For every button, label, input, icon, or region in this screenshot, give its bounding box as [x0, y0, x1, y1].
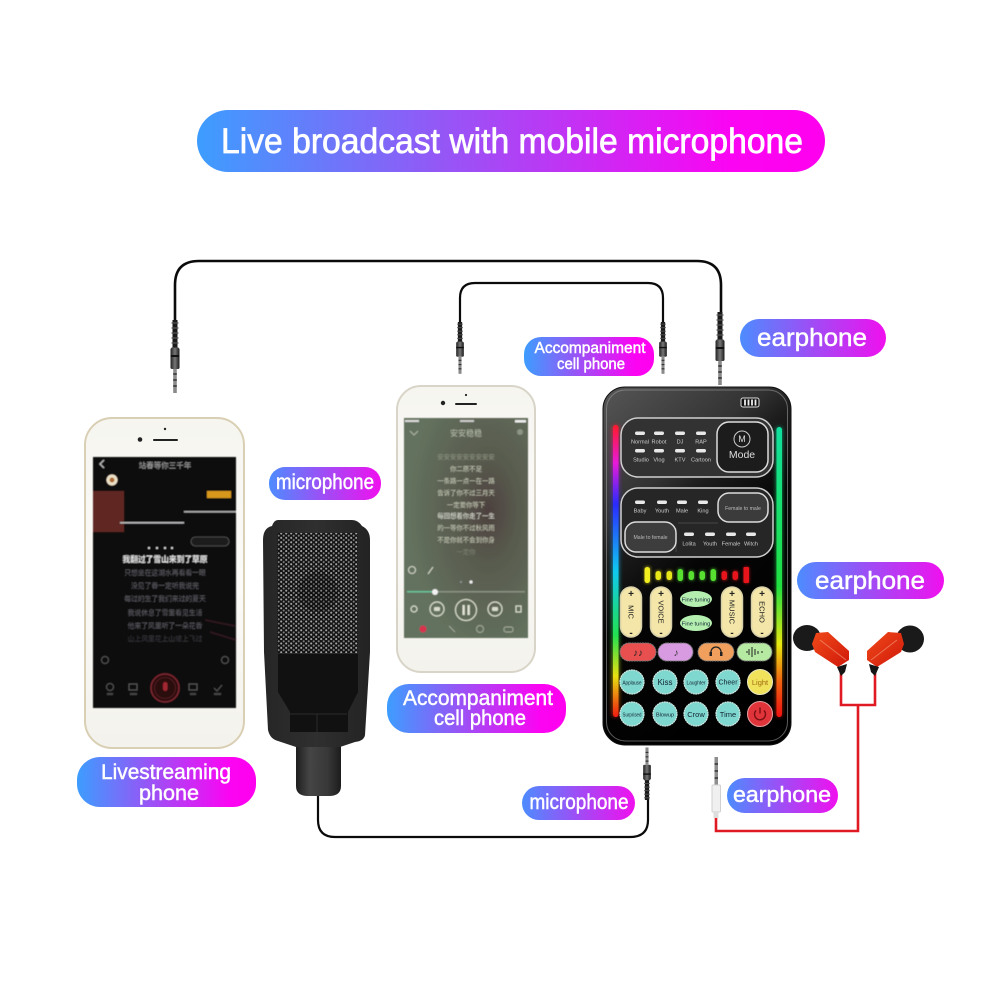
- female to male button: Female to male: [725, 506, 761, 512]
- lyrics: 我翻过了雪山来到了草原: [122, 554, 208, 564]
- progress bar: [407, 591, 525, 592]
- volume sliders: ECHO: [758, 601, 766, 623]
- power button: [748, 702, 772, 726]
- sound effect buttons: Applause: [622, 680, 642, 686]
- lyrics: 一定你: [456, 547, 476, 556]
- label: microphone (left): [269, 467, 381, 500]
- panel: voice selection: [621, 488, 773, 557]
- volume sliders: [620, 587, 772, 639]
- record button: [151, 674, 179, 702]
- device body: [603, 387, 791, 745]
- label: earphone (top): earphone: [757, 324, 867, 352]
- sound effect buttons: Surprised: [622, 712, 642, 718]
- battery indicator: [741, 398, 759, 407]
- panel: voice selection: Female: [722, 542, 740, 548]
- cable: microphone to device: [318, 747, 651, 837]
- left earbud: [793, 625, 849, 676]
- panel: mode selection: KTV: [675, 458, 686, 464]
- sound effect buttons: Crow: [687, 710, 705, 719]
- phone sensors: [441, 394, 477, 405]
- volume sliders: +: [628, 589, 634, 600]
- panel: mode selection: Cartoon: [691, 458, 711, 464]
- sound effect buttons: Time: [720, 710, 736, 719]
- panel: mode selection: Robot: [652, 440, 667, 446]
- panel: voice selection: King: [697, 508, 709, 514]
- lyrics: 一定要你等下: [447, 500, 486, 509]
- playback controls: [411, 600, 521, 620]
- mic grille: [277, 533, 358, 653]
- song title: 安安稳稳: [450, 428, 482, 438]
- volume sliders: -: [730, 628, 734, 639]
- panel: mode selection: [621, 418, 773, 477]
- panel: voice selection: Witch: [744, 542, 758, 548]
- sound effect buttons: Blowup: [656, 712, 674, 718]
- microphone: [263, 520, 370, 796]
- earphones: [712, 625, 924, 831]
- song title: 站春等你三千年: [139, 460, 192, 470]
- volume sliders: -: [760, 628, 764, 639]
- lyrics: [437, 452, 495, 556]
- female to male button: [718, 493, 768, 522]
- lyrics: 每回想着你走了一生: [437, 511, 495, 520]
- phone: livestreaming: [85, 418, 244, 748]
- title banner: Live broadcast with mobile microphone: [221, 122, 803, 161]
- phone body: [85, 418, 244, 748]
- panel: voice selection: Baby: [634, 508, 647, 514]
- male to female button: [625, 522, 676, 552]
- mic body: [263, 520, 370, 747]
- sound effect buttons: [620, 670, 772, 726]
- phone screen: 他来了风里听了一朵花香: [128, 621, 203, 630]
- sound effect buttons: Laughter: [686, 680, 706, 686]
- label: earphone (top): [740, 319, 886, 357]
- volume sliders: -: [629, 628, 633, 639]
- label: accompaniment cell phone (top): Accompaniment: [534, 340, 646, 357]
- label: accompaniment cell phone (bottom): Accompaniment: [403, 687, 553, 710]
- label: livestreaming phone: Livestreaming: [101, 761, 231, 784]
- label: microphone (bottom): microphone: [530, 791, 628, 814]
- label: livestreaming phone: [77, 757, 256, 807]
- phone: accompaniment: [397, 386, 535, 672]
- sound effect buttons: Kiss: [657, 678, 673, 687]
- fine tuning buttons: [680, 591, 712, 631]
- volume sliders: +: [759, 589, 765, 600]
- phone body: [397, 386, 535, 672]
- earphone wires: [716, 672, 875, 831]
- earphone plug: [712, 757, 720, 818]
- title banner: [197, 110, 825, 172]
- panel: mode selection: Vlog: [653, 458, 665, 464]
- voice changer device: [603, 387, 791, 745]
- lyrics: 告诉了你不过三月天: [437, 488, 495, 497]
- right earbud: [867, 626, 924, 676]
- label: earphone (bottom): earphone: [733, 782, 831, 807]
- mode button: Mode: [729, 449, 755, 461]
- label: accompaniment cell phone (bottom): [387, 684, 566, 733]
- panel: mode selection: Studio: [633, 458, 649, 464]
- panel: mode selection: Normal: [631, 440, 649, 446]
- volume sliders: VOICE: [656, 600, 666, 624]
- label: accompaniment cell phone (top): cell phone: [557, 356, 625, 373]
- lyrics: 的一等你不过秋风雨: [437, 523, 495, 532]
- volume sliders: +: [658, 589, 664, 600]
- label: earphone (right): earphone: [815, 567, 925, 595]
- label: accompaniment cell phone (bottom): cell phone: [434, 707, 526, 730]
- function buttons: ♪: [674, 648, 678, 659]
- label: earphone (bottom): [727, 778, 838, 813]
- light button: Light: [752, 678, 769, 687]
- phone screen: 没见了春一定听我说完: [131, 581, 199, 590]
- panel: mode selection: DJ: [677, 440, 684, 446]
- phone screen: [93, 457, 236, 708]
- male to female button: Male to female: [633, 535, 668, 541]
- panel: voice selection: Male: [676, 508, 688, 514]
- phone screen: [404, 418, 528, 638]
- sound effect buttons: Cheer: [718, 680, 738, 686]
- level meter: [644, 567, 749, 583]
- fine tuning buttons: Fine tuning: [682, 622, 710, 628]
- label: accompaniment cell phone (top): [524, 337, 654, 376]
- volume sliders: -: [659, 628, 663, 639]
- led strips: [612, 425, 782, 717]
- fine tuning buttons: Fine tuning: [682, 598, 710, 604]
- cable: accompaniment phone to device: [456, 283, 667, 374]
- mic lower panel: [278, 654, 358, 732]
- lyrics: 不是你就不会到你身: [437, 535, 495, 544]
- volume sliders: MUSIC: [728, 600, 736, 625]
- volume sliders: MIC: [626, 605, 636, 619]
- phone screen: 山上风里花上山坡上飞过: [128, 634, 203, 643]
- panel: voice selection: Youth: [655, 508, 669, 514]
- lyrics: 你二原不足: [450, 464, 483, 473]
- mic handle: [296, 744, 341, 796]
- label: livestreaming phone: phone: [139, 782, 199, 805]
- label: earphone (right): [797, 562, 944, 599]
- mode button: M: [738, 434, 746, 444]
- light button: [748, 670, 772, 694]
- phone screen: 只想坐在这湖水再看看一眼: [124, 568, 206, 577]
- lyrics: 安安安安安安安安安: [437, 452, 495, 461]
- phone screen: 每过的生了我们来过的夏天: [124, 594, 206, 603]
- mode button: [717, 422, 768, 472]
- function buttons: ♪♪: [633, 648, 643, 659]
- function buttons: [620, 643, 772, 661]
- panel: voice selection: Lolita: [682, 542, 697, 548]
- panel: mode selection: RAP: [695, 440, 707, 446]
- panel: voice selection: Youth: [703, 542, 717, 548]
- cable: livestreaming phone to earphone port: [170, 261, 724, 393]
- lyrics: 一条路一点一在一路: [437, 476, 495, 485]
- phone screen: 我说休息了雪里看见生活: [128, 608, 203, 617]
- phone sensors: [138, 428, 178, 442]
- volume sliders: +: [729, 589, 735, 600]
- label: microphone (left): microphone: [276, 471, 374, 494]
- label: microphone (bottom): [522, 786, 635, 820]
